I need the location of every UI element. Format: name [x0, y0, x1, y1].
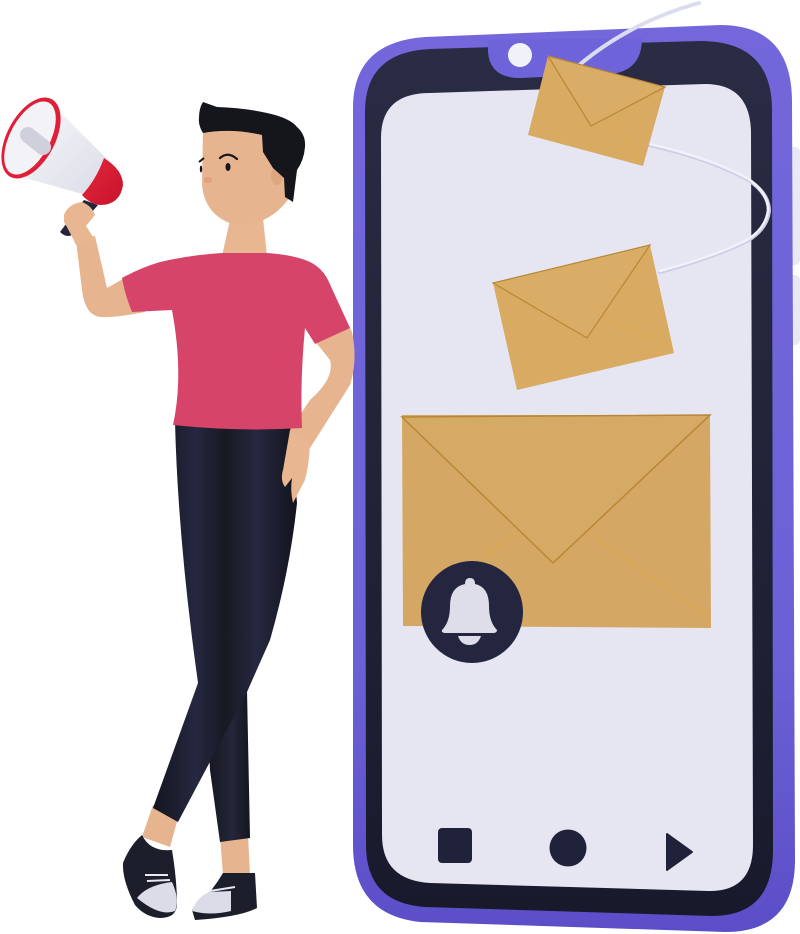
- hand on handle: [64, 202, 95, 245]
- far eyebrow: [199, 158, 204, 162]
- left shoe toe: [137, 882, 177, 912]
- home button: [550, 830, 586, 866]
- camera: [508, 43, 532, 67]
- wires between envelopes: [578, 3, 769, 272]
- left shoe stripes: [145, 875, 170, 881]
- phone body: [353, 25, 795, 932]
- megaphone bell rim: [0, 88, 73, 188]
- right shoe: [192, 873, 257, 920]
- bell icon: [442, 578, 497, 633]
- phone bezel: [365, 41, 773, 916]
- back leg: [205, 660, 250, 842]
- ear: [271, 167, 283, 185]
- top envelope: [528, 56, 665, 166]
- right shoe stripes: [210, 887, 235, 891]
- ankle left: [142, 805, 178, 847]
- eyebrow: [220, 155, 237, 159]
- far eye: [200, 166, 202, 172]
- phone nav buttons: [438, 828, 692, 870]
- stop button: [438, 828, 472, 863]
- eye: [226, 163, 230, 171]
- handle: [60, 200, 98, 236]
- upper wire: [578, 3, 699, 66]
- face: [202, 130, 290, 225]
- phone screen: [381, 84, 753, 891]
- side buttons: [786, 147, 800, 345]
- ankle right: [220, 834, 250, 875]
- raised arm: [76, 236, 145, 317]
- phone notch: [488, 38, 642, 78]
- lower wire: [650, 144, 768, 271]
- megaphone: [0, 88, 123, 245]
- megaphone inner: [0, 93, 66, 183]
- person: [76, 102, 355, 920]
- left shoe: [123, 835, 177, 918]
- phone: [353, 25, 800, 932]
- bell clapper: [458, 636, 481, 645]
- lower right arm: [290, 318, 355, 448]
- megaphone cone: [28, 135, 43, 147]
- right shoe toe: [192, 891, 231, 914]
- megaphone red back: [82, 158, 123, 205]
- bell badge: [421, 561, 523, 663]
- hair: [199, 102, 305, 202]
- large envelope: [402, 415, 711, 628]
- nose: [204, 177, 212, 183]
- front leg: [153, 422, 297, 822]
- middle envelope: [493, 245, 674, 390]
- megaphone body: [25, 114, 106, 195]
- right hand: [282, 430, 310, 503]
- shirt: [122, 253, 350, 429]
- lower wire shadow: [650, 145, 769, 272]
- play button: [667, 834, 692, 870]
- neck: [222, 218, 267, 256]
